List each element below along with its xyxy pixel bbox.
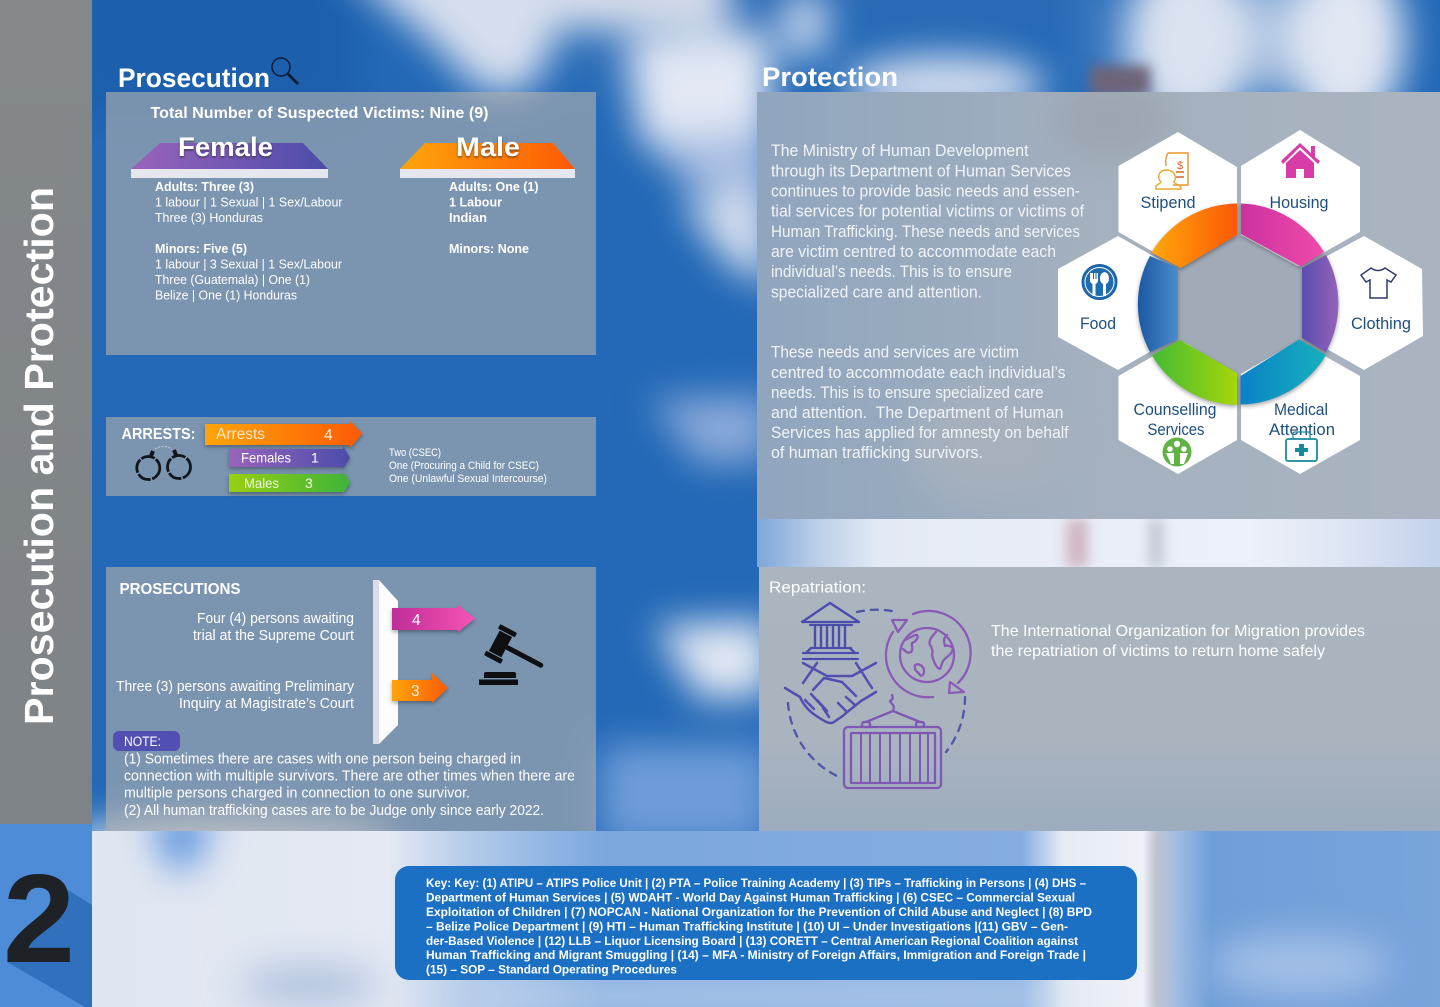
hexagon: housing [1241,130,1360,266]
arrest charges: Two (CSEC) [389,447,441,459]
sky behind protection panel [757,80,1440,519]
female breakdown: Belize | One (1) Honduras [155,288,297,302]
divider wall [373,580,398,744]
female breakdown: Minors: Five (5) [155,241,247,256]
key box: Exploitation of Children | (7) NOPCAN - National Organization for the Prevention of Child Abuse and Neglect | (8) BPD [426,907,1092,919]
icon: gavel [479,624,551,685]
protection paragraph two: and attention. The Department of Human [771,404,1064,422]
panel: protection [757,62,1440,519]
note badge [113,731,180,751]
globe with arrows [886,611,971,697]
key box: Department of Human Services | (5) WDAHT - World Day Against Human Trafficking | (6) CSEC – Commercial Sexual [426,892,1075,904]
protection paragraph one: are victim centred to accommodate each [771,243,1056,261]
arrest charges: One (Unlawful Sexual Intercourse) [389,473,547,485]
heading: prosecution: Prosecution [118,63,270,93]
icon: magnifying glass [272,58,298,84]
bank building [802,603,859,659]
hexagon: counselling services: Counselling [1134,401,1216,419]
male breakdown: Adults: One (1) [449,179,538,194]
icon: handcuffs [137,446,190,480]
protection paragraph one: individual’s needs. This is to ensure [771,263,1012,281]
protection paragraph two [771,344,1069,462]
protection paragraph one: continues to provide basic needs and essen- [771,183,1080,201]
supreme court text [193,611,354,644]
protection paragraph one: specialized care and attention. [771,284,982,302]
hexagon: counselling services [1118,342,1237,474]
note text: multiple persons charged in connection to one survivor. [124,786,470,802]
number block: 2 [3,848,75,989]
hexagon: clothing [1320,236,1423,370]
protection paragraph two: needs. This is to ensure specialized care [771,384,1044,402]
panel: prosecution victims [106,58,596,355]
arrow: arrests 4: Arrests [216,426,265,443]
note text: (1) Sometimes there are cases with one person being charged in [124,752,521,768]
arrow: arrests 4: 4 [324,427,333,444]
hexagon: medical attention [1241,342,1360,474]
female breakdown: Three (Guatemala) | One (1) [155,272,310,287]
key box: Key: Key: (1) ATIPU – ATIPS Police Unit | (2) PTA – Police Training Academy | (3) TIPs – Trafficking in Persons | (4) DHS – [426,878,1087,890]
hexagon: stipend: $ [1177,160,1183,172]
male breakdown: Indian [449,210,487,225]
male banner: Male [456,132,520,162]
magistrate court text: Inquiry at Magistrate’s Court [179,696,354,712]
arrow: females 1: Females [241,450,291,466]
prosecutions heading: PROSECUTIONS [120,581,241,598]
panel: arrests [106,417,596,496]
protection paragraph one [771,142,1084,302]
heading: protection: Protection [762,62,898,92]
arrow: magistrate court 3: 3 [411,683,420,700]
pale band between right panels [757,519,1440,567]
arrests label: ARRESTS: [122,426,196,443]
side bar: vertical heading: Prosecution and Protection [16,187,62,725]
services hexagon diagram [1058,130,1423,474]
repatriation text: The International Organization for Migration provides [991,623,1365,640]
female breakdown [155,179,343,302]
key box: Human Trafficking and Migrant Smuggling | (14) – MFA - Ministry of Foreign Affairs, Immigration and Foreign Trade | [426,950,1086,962]
arrow: arrests 4 [205,421,362,448]
protection paragraph two: centred to accommodate each individual’s [771,364,1066,382]
hexagon: housing: Housing [1270,194,1328,212]
dashed circle [788,610,965,776]
key box [395,866,1137,980]
male banner [400,132,575,178]
male breakdown: Minors: None [449,241,529,256]
arrest charges: One (Procuring a Child for CSEC) [389,460,539,472]
side bar: grey strip [0,0,92,824]
protection paragraph two: Services has applied for amnesty on behalf [771,424,1069,442]
hexagon: counselling services: Services [1148,421,1204,439]
supreme court text: trial at the Supreme Court [193,628,354,644]
female breakdown: Three (3) Honduras [155,210,263,225]
male breakdown [449,179,538,256]
protection paragraph one: Human Trafficking. These needs and services [771,223,1080,241]
protection paragraph one: through its Department of Human Services [771,163,1071,181]
icon: international cooperation [785,603,971,788]
repatriation text: the repatriation of victims to return home safely [991,643,1325,660]
hexagon: stipend [1118,132,1237,266]
male breakdown: 1 Labour [449,194,502,210]
key box: der-Based Violence | (12) LLB – Liquor Licensing Board | (13) CORETT – Central American Regional Coalition against [426,936,1078,948]
female breakdown: Adults: Three (3) [155,179,254,194]
note badge: NOTE: [124,734,161,749]
ring segments [1138,204,1338,405]
magistrate court text [116,679,355,712]
arrow: males 3 [229,471,350,494]
key box: (15) – SOP – Standard Operating Procedures [426,964,677,976]
hexagon: food: Food [1080,315,1116,333]
panel: prosecutions [106,567,596,831]
note text: (2) All human trafficking cases are to be Judge only since early 2022. [124,803,544,819]
hexagon: medical attention: Attention [1269,421,1335,439]
total suspected victims: Total Number of Suspected Victims: Nine (9) [150,105,488,122]
hexagon: stipend: Stipend [1140,194,1196,212]
supreme court text: Four (4) persons awaiting [197,611,354,627]
arrow: females 1: 1 [311,450,319,466]
protection paragraph one: tial services for potential victims or victims of [771,203,1084,221]
key box: – Belize Police Department | (9) HTI – Human Trafficking Institute | (10) UI – Under Investigations |(11) GBV – Gen- [426,922,1068,934]
number block [0,824,92,1007]
female banner: Female [178,132,273,162]
arrow: females 1 [229,446,350,469]
panel: repatriation [759,567,1440,831]
pole and red stripe [1066,66,1165,1007]
arrow: males 3: Males [244,475,279,491]
arrow: magistrate court 3 [392,673,448,703]
protection paragraph two: These needs and services are victim [771,344,1019,362]
arrest charges [389,447,547,485]
hexagon: clothing: Clothing [1351,315,1411,333]
sky behind repatriation panel [759,567,1440,831]
handshake [785,663,876,723]
shipping container [844,695,941,788]
repatriation heading: Repatriation: [769,580,866,596]
hexagon: food [1058,236,1160,370]
female breakdown: 1 labour | 3 Sexual | 1 Sex/Labour [155,256,343,272]
protection paragraph one: The Ministry of Human Development [771,142,1029,160]
female banner [131,132,328,178]
repatriation text [991,623,1365,660]
note text: connection with multiple survivors. There are other times when there are [124,768,575,784]
arrow: supreme court 4: 4 [412,612,421,629]
protection paragraph two: of human trafficking survivors. [771,444,983,462]
female breakdown: 1 labour | 1 Sexual | 1 Sex/Labour [155,194,343,210]
arrow: males 3: 3 [305,475,313,491]
arrow: supreme court 4 [392,605,475,632]
centre hexagon backdrop [1179,234,1301,375]
magistrate court text: Three (3) persons awaiting Preliminary [116,679,355,695]
lower sky ground [92,815,1440,1007]
hexagon: medical attention: Medical [1274,401,1328,419]
note text [124,752,575,819]
